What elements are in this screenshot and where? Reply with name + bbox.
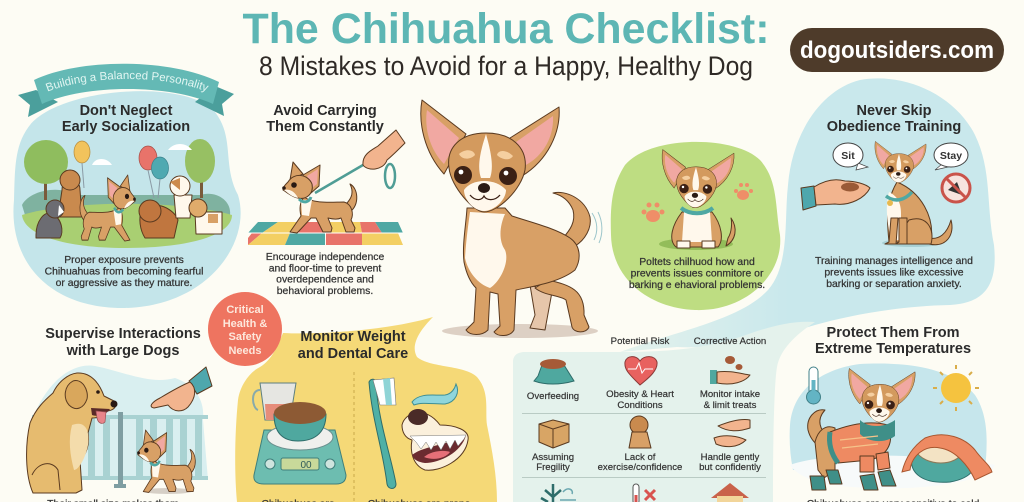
row 2: assuming fragility: exercise/confidence bbox=[598, 462, 682, 473]
table headers: Potential Risk bbox=[611, 336, 670, 347]
paw prints bbox=[642, 183, 753, 222]
panel: supervise interactions bbox=[27, 326, 212, 502]
main chihuahua illustration bbox=[421, 100, 602, 338]
badge: critical health: Safety bbox=[228, 331, 262, 343]
body text: Encourage independence bbox=[266, 252, 384, 263]
chihuahua in sweater bbox=[808, 368, 915, 490]
row 3: cut-off icons bbox=[541, 483, 749, 502]
title: 8 Mistakes to Avoid for a Happy, Healthy Dog bbox=[259, 51, 753, 81]
panel: extreme temperatures bbox=[790, 325, 995, 502]
row 1: overfeeding: Obesity & Heart bbox=[606, 389, 674, 400]
row 2: assuming fragility: Lack of bbox=[625, 452, 656, 463]
row 2: assuming fragility: Assuming bbox=[532, 452, 574, 463]
body text: Chihuahuas from becoming fearful bbox=[45, 266, 203, 278]
ribbon banner bbox=[18, 64, 234, 117]
heading: Monitor Weight bbox=[300, 329, 406, 345]
toothbrush bbox=[369, 378, 396, 488]
hand with treat bbox=[801, 180, 870, 210]
row 2: assuming fragility bbox=[532, 416, 761, 473]
row 2: assuming fragility: Fregility bbox=[536, 462, 570, 473]
sun bbox=[933, 365, 979, 411]
bed and blanket bbox=[902, 435, 992, 482]
heading: Them Constantly bbox=[266, 119, 384, 135]
row 1: overfeeding: & limit treats bbox=[704, 400, 757, 411]
heading: Obedience Training bbox=[827, 119, 961, 135]
heading: Extreme Temperatures bbox=[815, 341, 971, 357]
toothpaste and dog mouth bbox=[402, 384, 468, 470]
ribbon banner: Building a Balanced Personality bbox=[46, 70, 209, 92]
body text: prevents issues like excessive bbox=[824, 268, 964, 278]
table headers: Corrective Action bbox=[694, 336, 766, 347]
website badge: dogoutsiders.com bbox=[800, 37, 994, 64]
chihuahua on leash bbox=[282, 162, 357, 233]
sitting puppy bbox=[659, 150, 735, 250]
panel: obedience training bbox=[620, 78, 995, 352]
body text: Proper exposure prevents bbox=[64, 255, 184, 266]
panel: risk table bbox=[513, 322, 815, 502]
badge: critical health: Needs bbox=[228, 345, 262, 357]
heading: Protect Them From bbox=[827, 325, 959, 341]
badge: critical health: Health & bbox=[223, 318, 267, 330]
leash and hand bbox=[315, 130, 405, 193]
stay speech bubble: Stay bbox=[940, 150, 962, 162]
row 1: overfeeding: Conditions bbox=[617, 400, 663, 411]
title: The Chihuahua Checklist: bbox=[242, 5, 770, 53]
no barking icon bbox=[942, 174, 970, 202]
body text: overdependence and bbox=[276, 274, 374, 286]
panel: weight and dental bbox=[235, 317, 497, 502]
sit speech bubble: Sit bbox=[841, 150, 855, 162]
body text: barking e ehavioral problems. bbox=[629, 280, 765, 291]
small chihuahua bbox=[137, 430, 195, 494]
heading: with Large Dogs bbox=[66, 343, 179, 359]
heading: Don't Neglect bbox=[80, 103, 173, 119]
thermometer bbox=[806, 367, 820, 404]
badge: critical health bbox=[208, 292, 282, 366]
seated chihuahua bbox=[875, 141, 952, 247]
cold scene bbox=[790, 364, 987, 470]
body text: or aggressive as they mature. bbox=[56, 278, 192, 289]
fence bbox=[32, 412, 208, 488]
body text: and floor-time to prevent bbox=[269, 264, 381, 274]
heading: Supervise Interactions bbox=[45, 326, 201, 342]
body text: prevents issues conmitore or bbox=[631, 268, 764, 280]
panel: green puppy bbox=[611, 142, 780, 310]
stay speech bubble bbox=[934, 143, 968, 170]
body text: behavioral problems. bbox=[277, 286, 373, 297]
badge: critical health: Critical bbox=[226, 304, 264, 316]
sit speech bubble bbox=[833, 143, 868, 170]
floor mat bbox=[248, 222, 403, 245]
row 2: assuming fragility: Handle gently bbox=[701, 452, 760, 463]
heading: Avoid Carrying bbox=[273, 103, 377, 119]
park scene bbox=[22, 139, 232, 248]
row 1: overfeeding: Monitor intake bbox=[700, 389, 760, 400]
row 1: overfeeding bbox=[527, 356, 760, 411]
panel: avoid carrying bbox=[248, 103, 405, 297]
row 1: overfeeding: Overfeeding bbox=[527, 391, 579, 402]
panel: socialization bbox=[14, 64, 241, 308]
body text: Training manages intelligence and bbox=[815, 256, 973, 267]
heading: Never Skip bbox=[857, 103, 932, 119]
golden retriever bbox=[27, 373, 118, 493]
kitchen scale and bowl bbox=[253, 383, 346, 484]
heading: Early Socialization bbox=[62, 119, 190, 135]
website badge bbox=[790, 28, 1004, 72]
backdrop bbox=[32, 366, 208, 480]
title bbox=[242, 5, 770, 81]
body text: Poltets chilhuod how and bbox=[639, 257, 755, 268]
kitchen scale and bowl: 00 bbox=[300, 460, 312, 471]
row 2: assuming fragility: but confidently bbox=[699, 462, 761, 473]
pointing hand bbox=[151, 367, 212, 411]
heading: and Dental Care bbox=[298, 346, 408, 362]
body text: barking or separation anxiety. bbox=[826, 279, 962, 290]
